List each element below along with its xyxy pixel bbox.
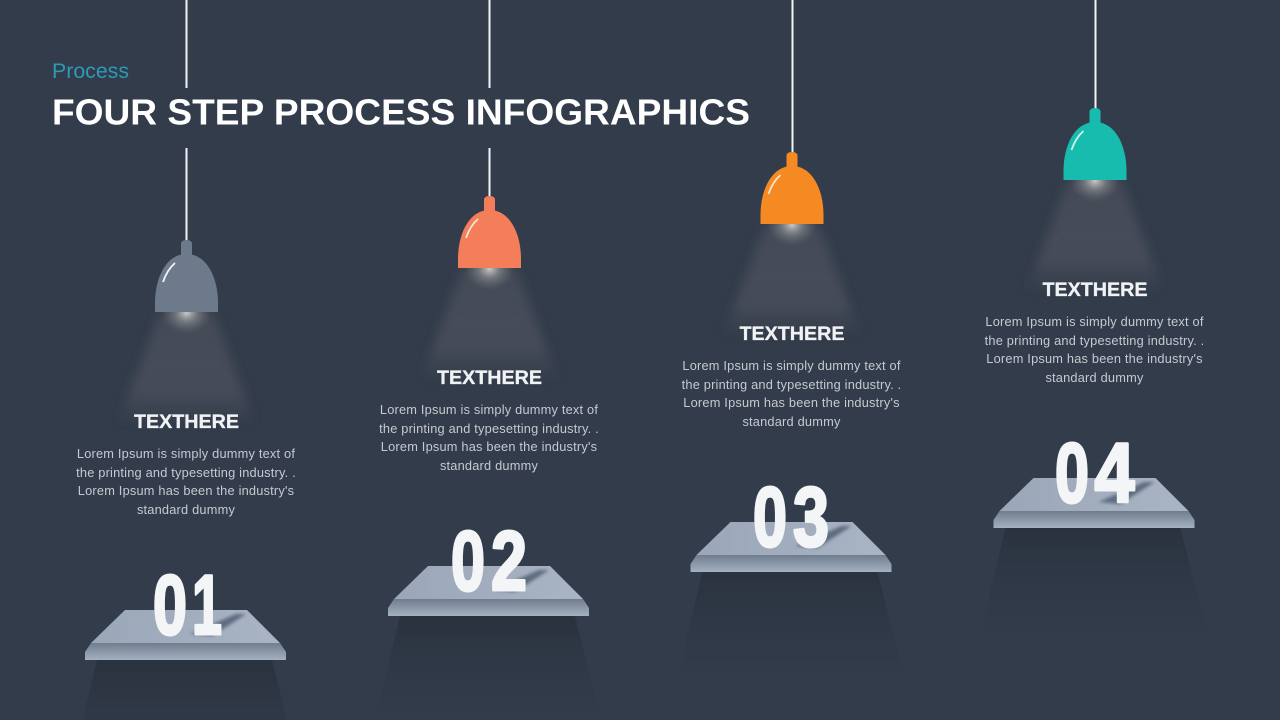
hanging cord 4 [1094, 0, 1096, 110]
description 4: the printing and typesetting industry. . [985, 333, 1204, 348]
step 1 [76, 0, 296, 720]
heading 3: TEXTHERE [740, 323, 844, 345]
number 3: 0 [753, 470, 787, 564]
number 4: 0 [1055, 426, 1089, 520]
description 1: standard dummy [137, 502, 235, 517]
description 4: Lorem Ipsum is simply dummy text of [985, 314, 1204, 329]
light beam 3 [722, 204, 862, 337]
light beam 4 [1026, 160, 1164, 293]
number 1: 0 [153, 558, 187, 652]
description 2: standard dummy [440, 458, 538, 473]
step 4 [978, 0, 1208, 640]
heading 4: TEXTHERE [1042, 279, 1148, 301]
number 3: 3 [793, 470, 829, 564]
hanging cord 2 [488, 0, 490, 198]
number 2: 2 [491, 514, 527, 608]
description 3: Lorem Ipsum is simply dummy text of [682, 358, 901, 373]
hanging cord 1 [186, 0, 188, 242]
lamp 1 [155, 240, 218, 312]
platform 2 [375, 566, 601, 720]
platform 3 [676, 522, 906, 684]
hanging cord 3 [792, 0, 794, 154]
light beam 2 [420, 248, 559, 381]
heading 1: TEXTHERE [134, 411, 239, 433]
lamp 2 [458, 196, 521, 268]
step 2 [375, 0, 601, 720]
number 4: 4 [1094, 426, 1135, 520]
description 4: Lorem Ipsum has been the industry's [986, 351, 1203, 366]
lamp 4 [1064, 108, 1126, 180]
platform 4 [978, 478, 1208, 640]
description 3: Lorem Ipsum has been the industry's [683, 395, 900, 410]
number 4 [1055, 426, 1135, 520]
step 3 [676, 0, 906, 684]
lamp 3 [760, 152, 824, 224]
description 4: standard dummy [1045, 370, 1144, 385]
description 3: the printing and typesetting industry. . [682, 377, 901, 392]
section label: Process [52, 59, 129, 83]
heading 2: TEXTHERE [437, 367, 542, 389]
title: FOUR STEP PROCESS INFOGRAPHICS [52, 92, 750, 132]
description 2: Lorem Ipsum has been the industry's [381, 439, 597, 454]
description 2: the printing and typesetting industry. . [379, 421, 599, 436]
number 2: 0 [451, 514, 485, 608]
description 1: Lorem Ipsum is simply dummy text of [77, 446, 295, 461]
platform 1 [82, 610, 287, 720]
number 1: 1 [192, 558, 222, 652]
description 1: Lorem Ipsum has been the industry's [78, 483, 294, 498]
light beam 1 [117, 292, 256, 425]
description 1: the printing and typesetting industry. . [76, 465, 296, 480]
number 2 [451, 514, 527, 608]
number 3 [753, 470, 829, 564]
description 2: Lorem Ipsum is simply dummy text of [380, 402, 598, 417]
number 1 [153, 558, 222, 652]
description 3: standard dummy [742, 414, 841, 429]
